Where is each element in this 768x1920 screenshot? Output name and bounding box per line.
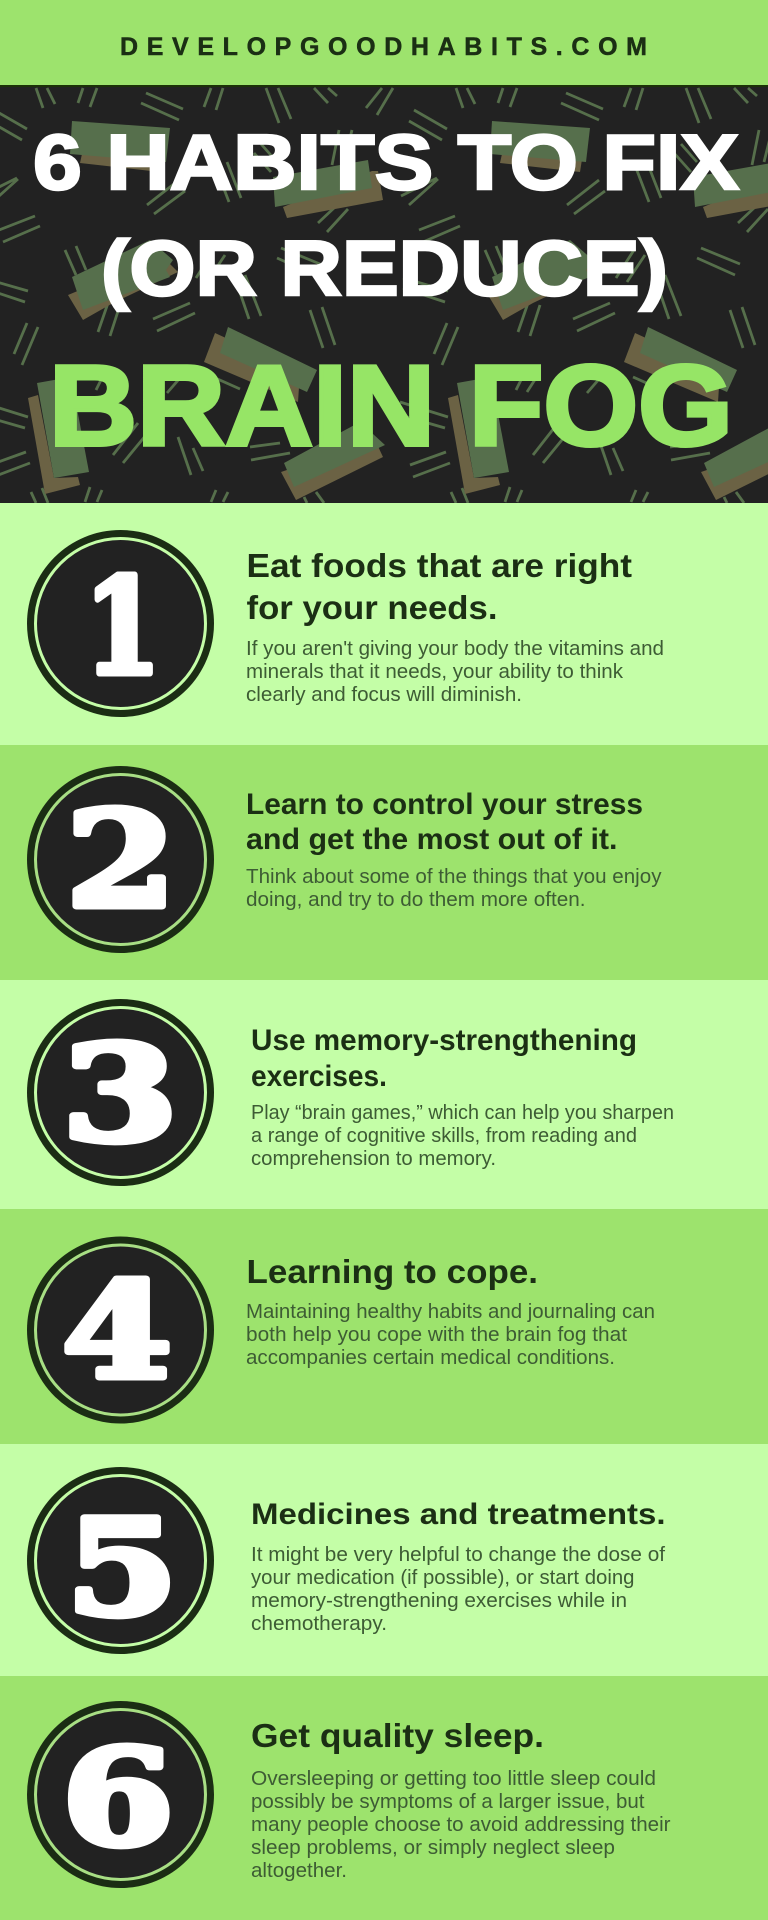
body text [251,1767,671,1882]
body text: chemotherapy. [251,1612,387,1635]
badge: number 3 [27,999,214,1186]
title line 2: (OR REDUCE) [101,224,668,312]
body text [246,1300,655,1369]
body text: Think about some of the things that you enjoy [246,865,662,888]
panel: habit 3 [0,980,768,1209]
body text: possibly be symptoms of a larger issue, but [251,1790,645,1813]
panel: habit 6 [0,1676,768,1920]
heading: exercises. [251,1060,387,1093]
badge: number 4: 4 [62,1254,172,1409]
heading [246,788,643,856]
heading: Use memory-strengthening [251,1024,637,1057]
panel: habit 2 [0,745,768,980]
badge: number 1 [27,530,214,717]
body text: If you aren't giving your body the vitamins and [246,637,664,660]
top banner [0,0,768,85]
heading: and get the most out of it. [246,823,618,856]
body text [246,865,662,911]
badge: number 5: 5 [66,1491,178,1646]
heading: Eat foods that are right [246,547,632,584]
body text: many people choose to avoid addressing their [251,1813,671,1836]
badge: number 4 [27,1236,214,1424]
badge: number 6 [27,1701,214,1888]
body text: sleep problems, or simply neglect sleep [251,1836,615,1859]
body text: Play “brain games,” which can help you sharpen [251,1101,674,1124]
heading: Learn to control your stress [246,788,643,821]
heading: Learning to cope. [246,1253,538,1290]
heading: for your needs. [246,589,498,626]
hero panel: title on patterned background [0,85,768,503]
title line 1: 6 HABITS TO FIX [33,118,739,206]
body text [251,1543,665,1635]
body text: accompanies certain medical conditions. [246,1346,615,1369]
panel: habit 5 [0,1444,768,1676]
panel: habit 4 [0,1209,768,1444]
body text: Maintaining healthy habits and journaling can [246,1300,655,1323]
heading: Get quality sleep. [251,1717,544,1754]
body text: your medication (if possible), or start doing [251,1566,634,1589]
title line 3: BRAIN FOG [49,343,733,470]
site name: DEVELOPGOODHABITS.COM [120,33,647,61]
body text: memory-strengthening exercises while in [251,1589,627,1612]
body text: altogether. [251,1859,347,1882]
panel: habit 1 [0,503,768,745]
body text: Oversleeping or getting too little sleep could [251,1767,656,1790]
body text [251,1101,674,1170]
badge: number 3: 3 [62,1017,178,1172]
body text: clearly and focus will diminish. [246,683,522,706]
body text: doing, and try to do them more often. [246,888,586,911]
heading [246,547,632,626]
badge: number 2 [27,766,214,953]
body text: comprehension to memory. [251,1147,496,1170]
heading: Medicines and treatments. [251,1498,666,1531]
badge: number 6: 6 [62,1721,174,1876]
heading [251,1024,637,1093]
badge: number 1: 1 [84,550,161,705]
body text [246,637,664,706]
body text: a range of cognitive skills, from reading and [251,1124,637,1147]
badge: number 2: 2 [66,783,176,938]
body text: both help you cope with the brain fog that [246,1323,627,1346]
body text: minerals that it needs, your ability to think [246,660,624,683]
body text: It might be very helpful to change the dose of [251,1543,665,1566]
badge: number 5 [27,1467,214,1654]
